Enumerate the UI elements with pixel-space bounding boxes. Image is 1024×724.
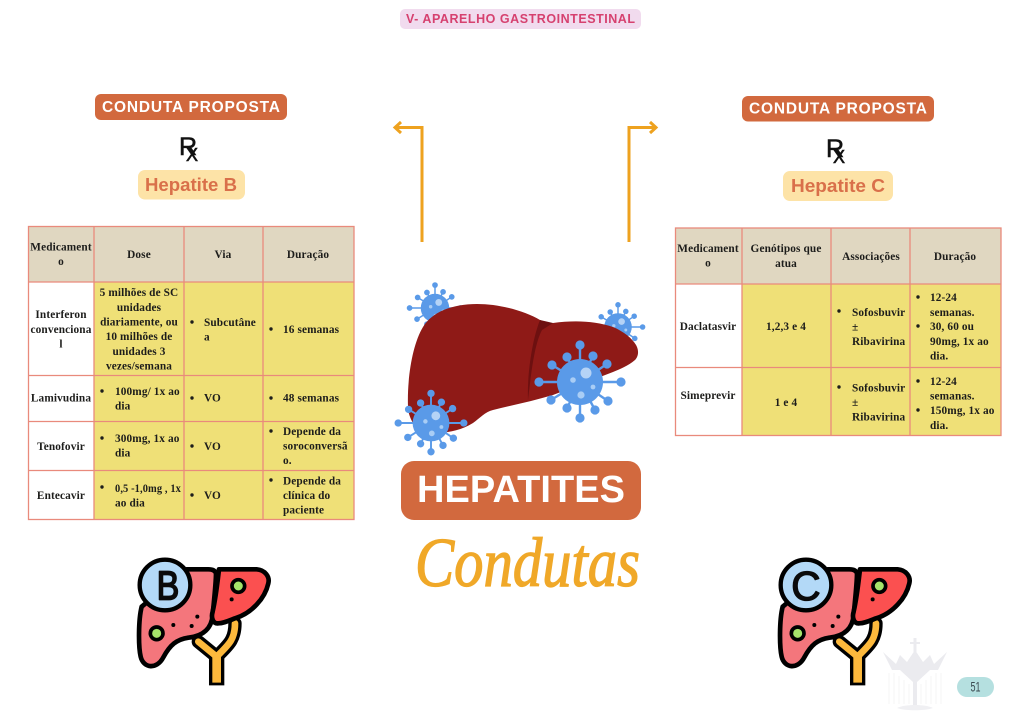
arrow: to Hepatite B: [395, 122, 422, 242]
title: Hepatites: HEPATITES: [417, 469, 625, 511]
label: Hepatite B: [138, 170, 245, 200]
section title: V- APARELHO GASTROINTESTINAL: [406, 12, 635, 26]
icon: liver Hepatite C: [780, 560, 910, 685]
table: Hepatite C: ±: [852, 397, 858, 409]
label: Hepatite C: [783, 171, 893, 201]
table: Hepatite C: 90mg, 1x ao: [930, 336, 989, 348]
table: Hepatite C: Sofosbuvir: [852, 307, 905, 319]
heading: conduta proposta B: CONDUTA PROPOSTA: [102, 99, 280, 116]
table: Hepatite B: VO: [204, 490, 221, 502]
table: Hepatite C: o: [705, 258, 711, 270]
table: Hepatite B: o: [58, 256, 64, 268]
title: Hepatites: [401, 461, 641, 520]
table: Hepatite B: soroconversã: [283, 440, 348, 452]
table: Hepatite C: Medicament: [677, 243, 739, 255]
table: Hepatite B: 16 semanas: [283, 324, 340, 336]
heading: conduta proposta B: [95, 94, 287, 120]
table: Hepatite C: ±: [852, 322, 858, 334]
label: Hepatite C: Hepatite C: [791, 176, 885, 196]
table: Hepatite C: Ribavirina: [852, 412, 906, 424]
table: Hepatite B: VO: [204, 441, 221, 453]
icon: Rx symbol B: R: [179, 133, 197, 161]
table: Hepatite B: Duração: [287, 249, 329, 261]
table: Hepatite B: Tenofovir: [37, 441, 85, 453]
table: Hepatite B: Via: [215, 249, 232, 261]
icon: liver Hepatite B: [139, 560, 269, 685]
table: Hepatite B: [28, 226, 354, 520]
table: Hepatite B: Depende da: [283, 426, 341, 438]
table: Hepatite C: semanas.: [930, 307, 975, 319]
table: Hepatite B: Interferon: [35, 309, 87, 321]
illustration: liver with viruses: [395, 283, 645, 455]
panel: Hepatite C heading: [742, 96, 934, 201]
table: Hepatite B: Medicament: [30, 242, 92, 254]
table: Hepatite C: Ribavirina: [852, 336, 906, 348]
table: Hepatite C: Sofosbuvir: [852, 382, 905, 394]
icon: Rx symbol C: R: [826, 135, 844, 163]
table: Hepatite C: 1 e 4: [775, 397, 798, 409]
table: Hepatite C: 150mg, 1x ao: [930, 405, 995, 417]
table: Hepatite C: Daclatasvir: [680, 321, 736, 333]
table: Hepatite C: 1,2,3 e 4: [766, 321, 806, 333]
table: Hepatite C: Simeprevir: [681, 390, 735, 402]
label: Hepatite B: Hepatite B: [145, 175, 237, 195]
table: Hepatite B: l: [59, 338, 63, 350]
table: Hepatite C: semanas.: [930, 390, 975, 402]
section title: [400, 9, 641, 29]
table: Hepatite B: o.: [283, 455, 292, 467]
table: Hepatite B: Dose: [127, 249, 151, 261]
table: Hepatite C: [676, 228, 1001, 436]
page number: 51: [970, 678, 981, 694]
table: Hepatite B: 48 semanas: [283, 392, 340, 404]
heading: conduta proposta C: CONDUTA PROPOSTA: [749, 100, 927, 118]
heading: conduta proposta C: [742, 96, 934, 122]
table: Hepatite B: Entecavir: [37, 490, 85, 502]
table: Hepatite C: 30, 60 ou: [930, 321, 974, 333]
table: Hepatite B: 100mg/ 1x ao: [115, 386, 180, 398]
table: Hepatite C: dia.: [930, 350, 948, 362]
watermark: crown and book: [883, 638, 947, 710]
table: Hepatite B: dia: [115, 448, 131, 460]
table: Hepatite B: clínica do: [283, 490, 331, 502]
icon: liver Hepatite C: C: [791, 563, 821, 609]
page number: [957, 677, 994, 697]
table: Hepatite B: paciente: [283, 504, 324, 516]
table: Hepatite B: vezes/semana: [106, 360, 172, 372]
table: Hepatite B: diariamente, ou: [100, 316, 178, 328]
table: Hepatite C: atua: [775, 258, 797, 270]
table: Hepatite C: Duração: [934, 251, 976, 263]
table: Hepatite B: ao dia: [115, 498, 145, 510]
table: Hepatite B: 10 milhões de: [106, 331, 172, 343]
icon: Rx symbol B: X: [186, 145, 198, 165]
table: Hepatite B: 5 milhões de SC: [100, 287, 178, 299]
table: Hepatite B: dia: [115, 400, 131, 412]
table: Hepatite B: convenciona: [31, 324, 92, 336]
table: Hepatite B: unidades: [117, 302, 162, 314]
table: Hepatite B: VO: [204, 392, 221, 404]
table: Hepatite B: Lamivudina: [31, 392, 91, 404]
table: Hepatite B: unidades 3: [112, 346, 166, 358]
table: Hepatite B: a: [204, 332, 210, 344]
table: Hepatite C: dia.: [930, 420, 948, 432]
icon: Rx symbol C: X: [833, 147, 845, 167]
table: Hepatite C: Genótipos que: [751, 243, 821, 255]
table: Hepatite C: Associações: [842, 251, 900, 263]
table: Hepatite B: 300mg, 1x ao: [115, 433, 180, 445]
icon: liver Hepatite B: B: [157, 563, 179, 609]
table: Hepatite B: Depende da: [283, 476, 341, 488]
arrow: to Hepatite C: [629, 122, 656, 242]
table: Hepatite C: 12-24: [930, 376, 957, 388]
table: Hepatite B: Subcutâne: [204, 317, 256, 329]
table: Hepatite B: 0,5 -1,0mg , 1x: [115, 483, 181, 495]
table: Hepatite C: 12-24: [930, 292, 957, 304]
panel: Hepatite B heading: [95, 94, 287, 200]
subtitle: Condutas: Condutas: [415, 525, 640, 602]
